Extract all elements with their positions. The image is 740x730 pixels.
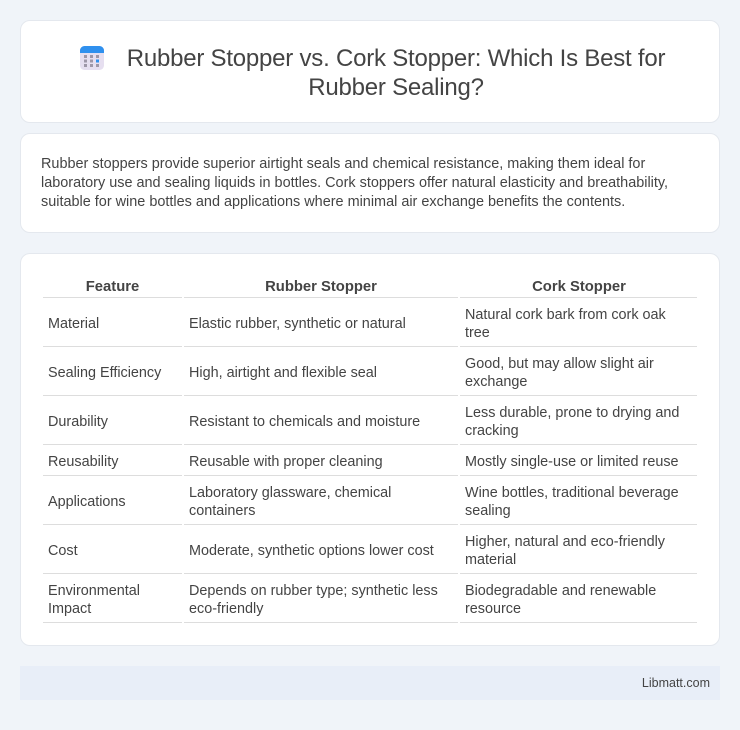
row: Reusability: Mostly single-use or limited reuse bbox=[465, 454, 679, 470]
row: Durability: cracking bbox=[465, 423, 519, 439]
row: Reusability: Reusable with proper cleaning bbox=[189, 454, 383, 470]
row: Cost: Moderate, synthetic options lower cost bbox=[189, 543, 434, 559]
row: Environmental Impact bbox=[48, 583, 656, 617]
row: Environmental Impact: Depends on rubber type; synthetic less bbox=[189, 583, 438, 599]
row: Reusability bbox=[48, 454, 679, 470]
table header row: Cork Stopper bbox=[532, 279, 626, 295]
title: Rubber Stopper vs. Cork Stopper: Which Is Best for Rubber Sealing? bbox=[127, 45, 665, 101]
row: Sealing Efficiency: exchange bbox=[465, 374, 527, 390]
row: Applications: Applications bbox=[48, 494, 126, 510]
footer credit: Libmatt.com bbox=[642, 676, 710, 690]
intro text panel bbox=[20, 133, 720, 233]
row: Environmental Impact: Impact bbox=[48, 601, 91, 617]
row: Environmental Impact: Biodegradable and renewable bbox=[465, 583, 656, 599]
row: Applications: Wine bottles, traditional beverage bbox=[465, 485, 679, 501]
title card bbox=[20, 20, 720, 123]
row: Sealing Efficiency: Good, but may allow slight air bbox=[465, 356, 654, 372]
row: Cost: Cost bbox=[48, 543, 78, 559]
intro paragraph: Rubber stoppers provide superior airtight seals and chemical resistance, making them ideal for bbox=[41, 156, 645, 172]
row: Material: Natural cork bark from cork oak bbox=[465, 307, 666, 323]
row: Applications: containers bbox=[189, 503, 255, 519]
row: Material bbox=[48, 307, 666, 341]
icon: calendar bbox=[80, 46, 104, 70]
row: Cost: material bbox=[465, 552, 516, 568]
row: Material: Elastic rubber, synthetic or natural bbox=[189, 316, 406, 332]
row: Material: Material bbox=[48, 316, 99, 332]
intro paragraph: suitable for wine bottles and applications where minimal air exchange benefits the contents. bbox=[41, 194, 625, 210]
row: Sealing Efficiency: Sealing Efficiency bbox=[48, 365, 161, 381]
row: Durability: Durability bbox=[48, 414, 108, 430]
row: Applications: sealing bbox=[465, 503, 511, 519]
table header row: Rubber Stopper bbox=[265, 279, 377, 295]
row: Sealing Efficiency bbox=[48, 356, 654, 390]
table header row: Feature bbox=[86, 279, 139, 295]
intro paragraph bbox=[41, 156, 668, 210]
row: Durability: Less durable, prone to drying and bbox=[465, 405, 679, 421]
row: Durability bbox=[48, 405, 679, 439]
row: Durability: Resistant to chemicals and moisture bbox=[189, 414, 420, 430]
row: Environmental Impact: eco-friendly bbox=[189, 601, 263, 617]
row: Cost bbox=[48, 534, 665, 568]
row: Cost: Higher, natural and eco-friendly bbox=[465, 534, 665, 550]
footer bar bbox=[20, 666, 720, 700]
row: Sealing Efficiency: High, airtight and flexible seal bbox=[189, 365, 377, 381]
row: Applications: Laboratory glassware, chemical bbox=[189, 485, 391, 501]
row: Reusability: Reusability bbox=[48, 454, 118, 470]
row: Environmental Impact: resource bbox=[465, 601, 521, 617]
row: Material: tree bbox=[465, 325, 490, 341]
intro paragraph: laboratory use and sealing liquids in bottles. Cork stoppers offer natural elasticity and breathability, bbox=[41, 175, 668, 191]
table header row bbox=[86, 279, 626, 295]
row: Applications bbox=[48, 485, 679, 519]
row: Environmental Impact: Environmental bbox=[48, 583, 140, 599]
comparison table panel bbox=[20, 253, 720, 646]
